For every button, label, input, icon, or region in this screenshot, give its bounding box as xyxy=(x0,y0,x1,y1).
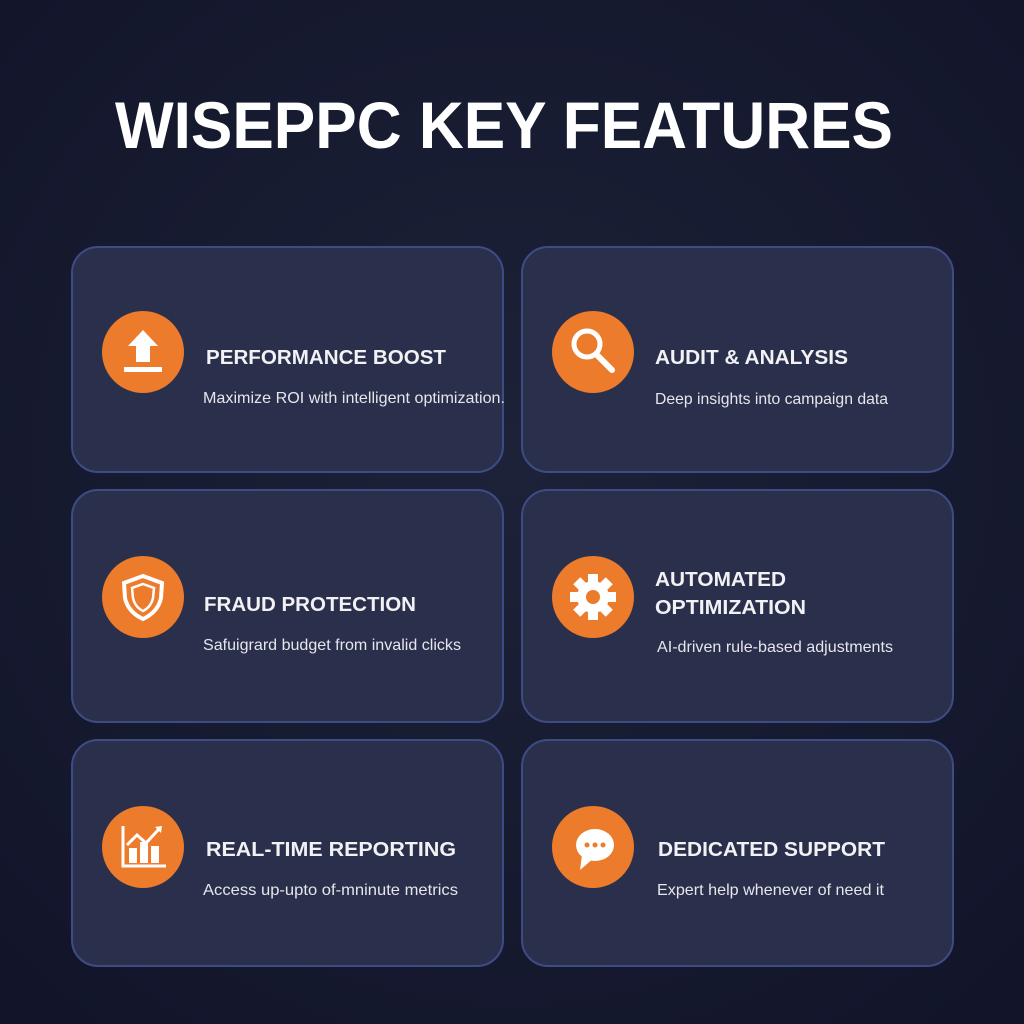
description: Safuigrard budget from invalid clicks xyxy=(203,637,461,654)
description: Expert help whenever of need it xyxy=(657,882,885,899)
icon: gear xyxy=(552,556,634,638)
icon: chart xyxy=(102,806,184,888)
panel: fraud protection xyxy=(72,490,503,722)
description: AI-driven rule-based adjustments xyxy=(657,639,893,656)
panel: automated optimization: OPTIMIZATION xyxy=(655,597,806,619)
icon: shield xyxy=(102,556,184,638)
panel: performance boost xyxy=(72,247,505,472)
panel: dedicated support xyxy=(522,740,953,966)
title: WISEPPC KEY FEATURES xyxy=(115,88,893,162)
heading: AUDIT & ANALYSIS xyxy=(655,347,848,369)
panel: real-time reporting xyxy=(72,740,503,966)
panel: automated optimization xyxy=(522,490,953,722)
heading: REAL-TIME REPORTING xyxy=(206,839,456,861)
icon: magnifier xyxy=(552,311,634,393)
icon: chat bubble xyxy=(552,806,634,888)
heading: DEDICATED SUPPORT xyxy=(658,839,885,861)
icon: upload arrow xyxy=(102,311,184,393)
panel: audit & analysis xyxy=(522,247,953,472)
heading: AUTOMATED xyxy=(655,569,786,591)
heading: FRAUD PROTECTION xyxy=(204,594,416,616)
heading: PERFORMANCE BOOST xyxy=(206,347,446,369)
description: Maximize ROI with intelligent optimization. xyxy=(203,390,505,407)
description: Access up-upto of-mninute metrics xyxy=(203,882,458,899)
description: Deep insights into campaign data xyxy=(655,391,888,408)
